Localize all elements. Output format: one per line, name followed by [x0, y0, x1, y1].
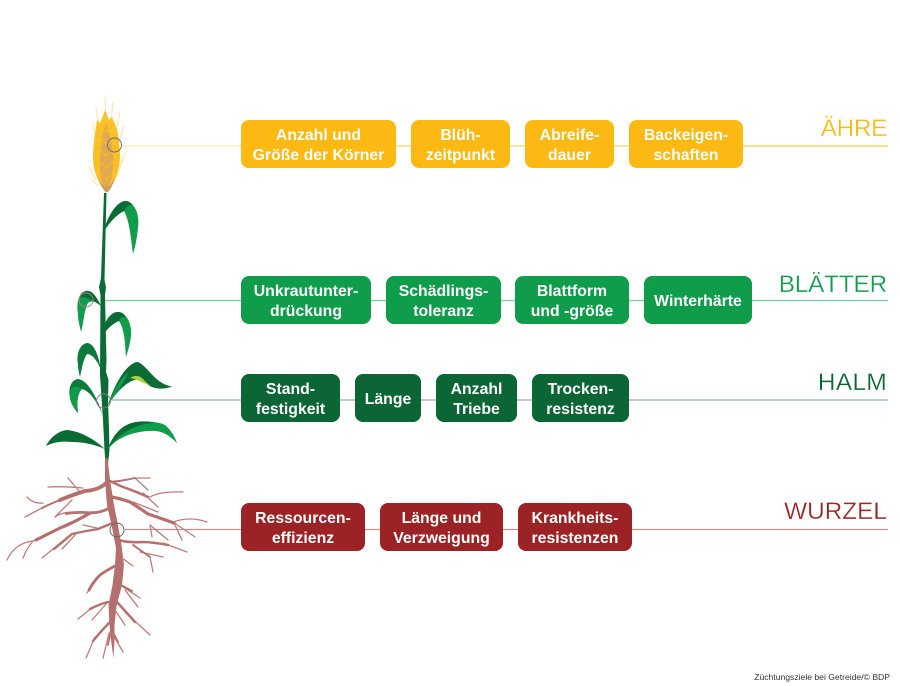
box: Unkrautunterdrückung	[241, 276, 371, 324]
box: Winterhärte: Winterhärte	[654, 293, 742, 310]
box: Anzahl und Größe der Körner: Anzahl und	[276, 127, 361, 144]
box: Krankheitsresistenzen: resistenzen	[532, 530, 618, 547]
heading: Halm: HALM	[818, 369, 887, 396]
box: Backeigenschaften: schaften	[654, 147, 718, 164]
box: Abreifedauer: dauer	[548, 147, 591, 164]
box: Schädlingstoleranz	[386, 276, 501, 324]
box: Länge und Verzweigung: Verzweigung	[393, 530, 490, 547]
box: Ressourceneffizienz	[241, 503, 365, 551]
box: Standfestigkeit: festigkeit	[256, 401, 325, 418]
box: Trockenresistenz: resistenz	[546, 401, 615, 418]
box: Trockenresistenz: Trocken-	[548, 381, 613, 398]
heading: Blätter: BLÄTTER	[779, 271, 887, 298]
box: Abreifedauer: Abreife-	[540, 127, 599, 144]
box: Krankheitsresistenzen: Krankheits-	[532, 510, 618, 527]
box: Krankheitsresistenzen	[518, 503, 632, 551]
connector line: Halm	[112, 399, 888, 401]
leaf: third left	[77, 343, 101, 377]
box: Ressourceneffizienz: effizienz	[272, 530, 334, 547]
marker circle: Ähre	[108, 138, 122, 152]
leaf: second left	[77, 291, 101, 332]
box: Länge und Verzweigung	[380, 503, 503, 551]
root: fine branch tips	[7, 478, 207, 658]
box: Unkrautunterdrückung: Unkrautunter-	[254, 283, 358, 300]
box: Standfestigkeit	[241, 374, 340, 422]
roots	[7, 458, 207, 658]
leaf: large right	[108, 362, 172, 405]
root: thicker branches	[36, 478, 174, 645]
heading: Ähre: ÄHRE	[821, 115, 887, 142]
root: main taproot	[105, 458, 124, 658]
box: Anzahl Triebe	[436, 374, 517, 422]
marker circle: Halm	[96, 394, 110, 408]
marker circle: Wurzel	[110, 523, 124, 537]
box: Blattform und -größe	[515, 276, 629, 324]
box: Blühzeitpunkt: Blüh-	[440, 127, 481, 144]
box: Winterhärte	[644, 276, 752, 324]
wheat ear	[89, 97, 127, 192]
leaf: lower left	[46, 430, 105, 449]
box: Anzahl und Größe der Körner	[241, 120, 396, 168]
leaf: upper	[103, 201, 138, 254]
connector line: Blätter	[103, 300, 888, 302]
heading: Wurzel: WURZEL	[784, 498, 887, 525]
box: Schädlingstoleranz: toleranz	[413, 303, 474, 320]
box: Anzahl Triebe: Anzahl	[451, 381, 502, 398]
leaf: lower right	[108, 421, 177, 449]
leaf: second right	[101, 312, 131, 357]
box: Ressourceneffizienz: Ressourcen-	[255, 510, 351, 527]
box: Blühzeitpunkt: zeitpunkt	[426, 147, 495, 164]
stem	[99, 193, 110, 478]
box: Länge	[355, 374, 421, 422]
box: Abreifedauer	[525, 120, 614, 168]
row: Wurzel	[241, 503, 632, 551]
box: Blühzeitpunkt	[411, 120, 510, 168]
box: Backeigenschaften	[629, 120, 743, 168]
box: Länge: Länge	[365, 391, 411, 408]
row: Halm	[241, 374, 629, 422]
marker circle: Blätter	[79, 293, 93, 307]
box: Backeigenschaften: Backeigen-	[644, 127, 728, 144]
box: Trockenresistenz	[532, 374, 629, 422]
caption: Züchtungsziele bei Getreide/© BDP	[754, 672, 890, 682]
leaf: fourth left	[69, 379, 103, 415]
box: Unkrautunterdrückung: drückung	[270, 303, 342, 320]
box: Anzahl und Größe der Körner: Größe der Körner	[253, 147, 384, 164]
box: Anzahl Triebe: Triebe	[453, 401, 500, 418]
box: Blattform und -größe: und -größe	[531, 303, 613, 320]
box: Schädlingstoleranz: Schädlings-	[399, 283, 488, 300]
row: Blätter	[241, 276, 752, 324]
box: Länge und Verzweigung: Länge und	[402, 510, 481, 527]
box: Standfestigkeit: Stand-	[266, 381, 315, 398]
connector line: Wurzel	[125, 528, 888, 530]
connector line: Ähre	[122, 145, 888, 147]
box: Blattform und -größe: Blattform	[537, 283, 607, 300]
row: Ähre	[241, 120, 743, 168]
